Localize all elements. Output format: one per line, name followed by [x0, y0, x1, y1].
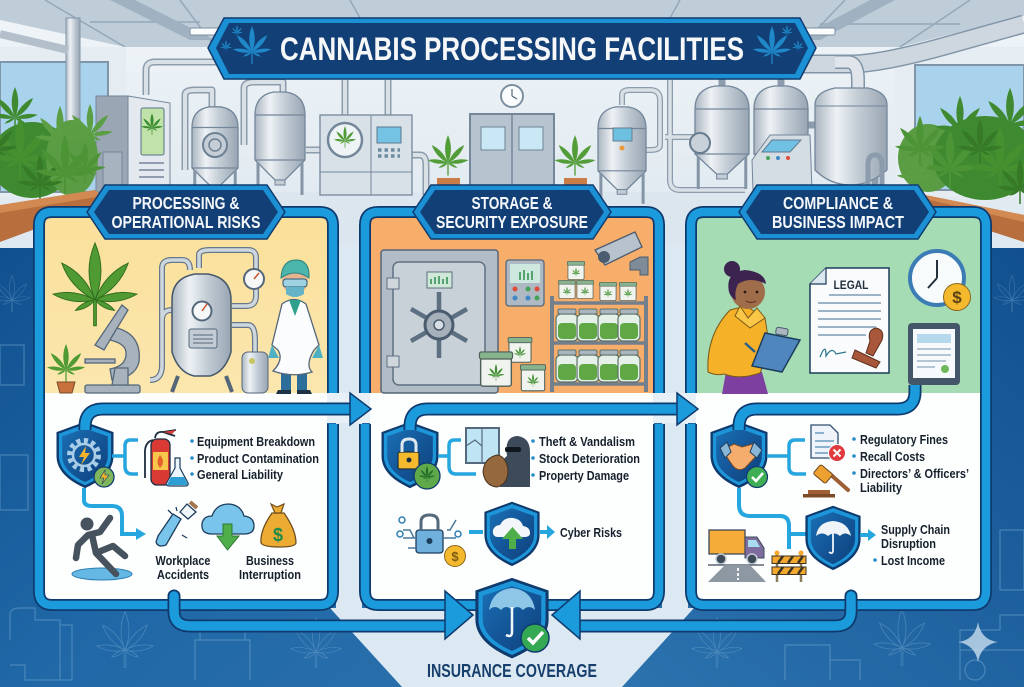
icon: banner leaf left [220, 25, 271, 64]
facility background scene [0, 0, 1024, 260]
arrow: processing to insurance [174, 591, 473, 639]
panel: compliance and business impact [691, 212, 986, 605]
left window [0, 18, 126, 197]
arrow: processing to storage [85, 393, 371, 430]
right duct [800, 24, 1024, 88]
arrow: storage to compliance [410, 393, 698, 430]
label: business interruption: Interruption [239, 568, 301, 582]
risk list: supply chain: Lost Income [881, 554, 945, 568]
right window [895, 47, 1024, 197]
illustration: process pipes [150, 250, 256, 380]
risk list: processing: Product Contamination [197, 452, 319, 466]
icon: broken test tube [156, 502, 197, 546]
control machine with leaf window [320, 115, 412, 195]
section heading: storage [413, 185, 611, 239]
risk list: processing: General Liability [197, 468, 283, 482]
risk list: compliance: Directors’ & Officers’ [860, 467, 969, 481]
risk list: supply chain: Supply Chain [881, 523, 950, 537]
section heading: compliance: COMPLIANCE & [783, 193, 893, 213]
risk list: storage: Stock Deterioration [539, 452, 640, 466]
tank: extractor left [192, 107, 238, 200]
illustration: large cannabis leaf [53, 243, 137, 326]
panel: processing and operational risks [39, 212, 333, 605]
section heading: compliance [739, 185, 936, 239]
connector bracket [438, 440, 476, 474]
label: cyber risks: Cyber Risks [560, 526, 622, 540]
section heading: storage: SECURITY EXPOSURE [436, 212, 588, 232]
arrow: compliance to insurance [552, 591, 851, 639]
illustration: pressure gauge [244, 269, 264, 289]
section heading: compliance: BUSINESS IMPACT [772, 212, 904, 232]
icon: digital padlock with circuit and coin: $ [451, 549, 459, 564]
illustration: compliance officer with clipboard [708, 261, 800, 394]
icon: digital padlock with circuit and coin [397, 515, 466, 566]
risk list: storage [531, 435, 640, 483]
label: business interruption [239, 554, 301, 582]
item: umbrella shield [805, 506, 861, 570]
arrow to cyber risks [540, 525, 555, 539]
icon: broken window [466, 428, 499, 463]
illustration: scientist in lab coat [268, 260, 323, 394]
title text: CANNABIS PROCESSING FACILITIES [280, 31, 744, 67]
illustration: bank vault [381, 250, 498, 393]
icon: cloud with down arrow [202, 504, 254, 550]
illustration: tablet [908, 323, 960, 385]
section heading: processing [87, 185, 285, 239]
illustration: legal document and stamp [810, 268, 889, 373]
illustration: security camera [595, 232, 648, 275]
illustration: storage shelf with jars [552, 296, 646, 392]
section heading: storage: STORAGE & [472, 193, 553, 213]
connector bracket [767, 440, 806, 474]
label: business interruption: Business [246, 554, 294, 568]
illustration: stacked cans on shelf [558, 261, 637, 300]
connector to supply chain group [739, 488, 807, 549]
risk list: supply chain [873, 523, 950, 568]
arrow: tablet to compliance shield [739, 385, 915, 430]
watermark sparkle [958, 622, 998, 662]
illustration: product tins [479, 338, 546, 391]
floor [126, 192, 896, 260]
illustration: keypad monitor [506, 260, 544, 306]
item: partnership shield with handshake [710, 422, 768, 488]
panel: storage and security exposure [365, 212, 659, 605]
icon: fined document [811, 425, 846, 462]
title banner [208, 18, 816, 79]
light centre wedge behind panels [330, 245, 694, 687]
illustration: microscope [85, 305, 140, 393]
illustration: legal document and stamp: LEGAL [834, 278, 868, 292]
risk list: processing: Equipment Breakdown [197, 435, 315, 449]
arrow gap halos between panels [327, 393, 696, 423]
item: security shield with padlock [382, 422, 440, 489]
connecting pipes [146, 62, 875, 195]
risk list: supply chain: Disruption [881, 537, 936, 551]
tank: conical [255, 92, 305, 195]
icon: fire extinguisher and flask [145, 430, 188, 486]
illustration: potted seedling [47, 344, 85, 393]
risk list: compliance: Liability [860, 481, 902, 495]
item: cloud security shield [484, 502, 540, 566]
icon: money bag: $ [273, 525, 283, 545]
icon: masked thief with sack [483, 436, 530, 487]
potted plants by the door [427, 135, 596, 185]
tanks: large pair and console [690, 86, 812, 190]
risk list: storage: Theft & Vandalism [539, 435, 635, 449]
arrow to supply chain list [860, 529, 876, 541]
right cannabis plants and planter [895, 88, 1024, 242]
section heading: processing: OPERATIONAL RISKS [112, 212, 260, 232]
icon: person slipping on wet floor [72, 518, 132, 580]
icon: money bag [261, 504, 296, 547]
double door [470, 114, 554, 196]
tank: largest right [815, 88, 887, 195]
flow arrow to lower row [84, 488, 146, 540]
risk list: processing [190, 435, 319, 482]
illustration: clock with coin [910, 251, 970, 310]
risk list: compliance: Recall Costs [860, 450, 925, 464]
blue lower background with blueprint pattern [0, 248, 1024, 687]
icon: delivery truck on cracked road [708, 530, 766, 582]
illustration: clock with coin: $ [952, 288, 962, 307]
risk list: compliance: Regulatory Fines [860, 433, 948, 447]
tank: right conical [598, 107, 646, 204]
icon: gavel [803, 464, 848, 498]
label: insurance coverage: INSURANCE COVERAGE [427, 661, 597, 681]
icon: road barrier [772, 550, 806, 582]
illustration: stainless processing vessel [172, 274, 232, 392]
insurance coverage shield [475, 578, 549, 658]
left cabinet machine [96, 96, 170, 192]
connector bracket [112, 440, 138, 474]
connector arrow to cloud shield [469, 530, 483, 534]
item: protection shield with gear [56, 422, 114, 488]
wall clock [501, 85, 523, 107]
risk list: compliance [852, 433, 969, 495]
label: workplace accidents: Workplace [156, 554, 211, 568]
section heading: processing: PROCESSING & [132, 193, 240, 213]
illustration: small canister [242, 352, 268, 393]
ceiling [0, 0, 1024, 47]
icon: banner leaf right [753, 25, 804, 64]
label: workplace accidents: Accidents [157, 568, 209, 582]
left cannabis plants and planter [0, 87, 113, 242]
label: workplace accidents [156, 554, 211, 582]
risk list: storage: Property Damage [539, 469, 629, 483]
